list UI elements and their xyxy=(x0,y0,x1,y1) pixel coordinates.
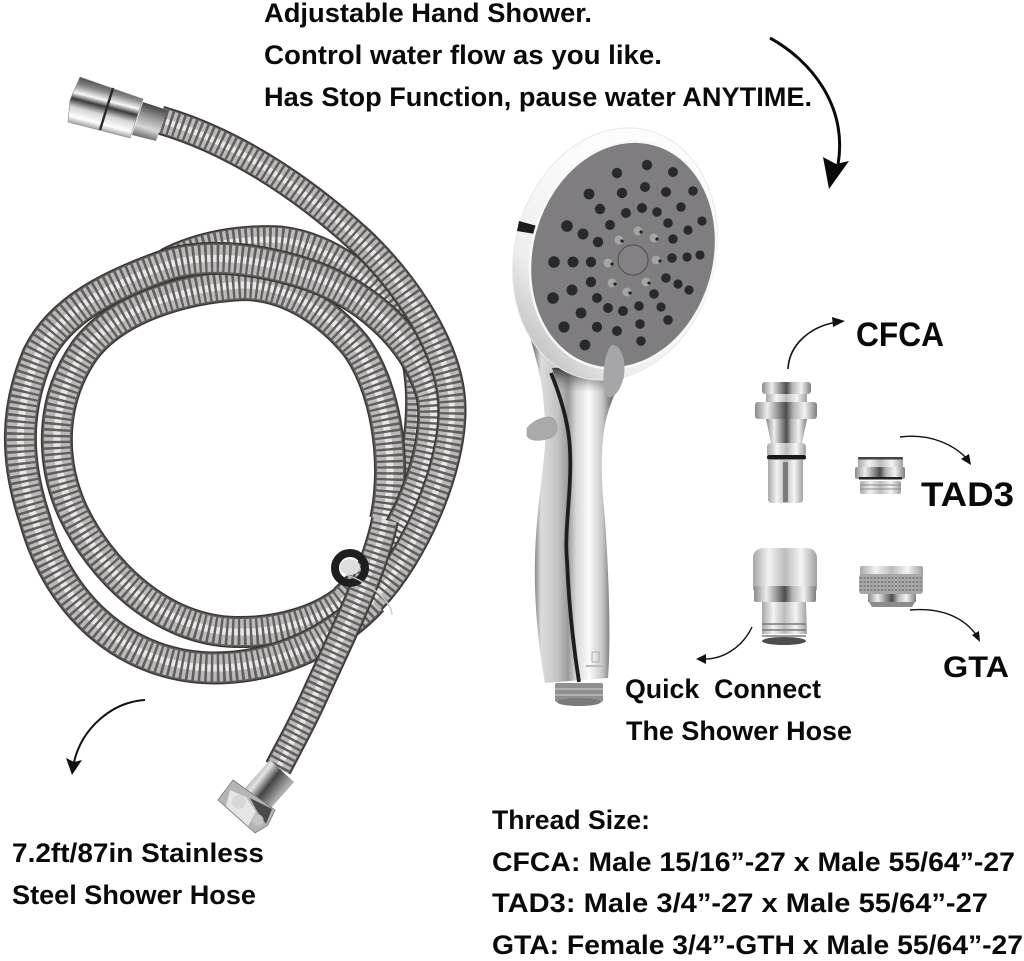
shower head rim xyxy=(484,103,746,405)
nozzle holes xyxy=(547,160,707,350)
thread size specifications: TAD3: Male 3/4”-27 x Male 55/64”-27 xyxy=(492,888,988,918)
arrow: to quick connect xyxy=(696,627,752,664)
hose strand to bottom nut xyxy=(278,520,385,768)
center disc xyxy=(618,245,648,275)
thread size specifications: CFCA: Male 15/16”-27 x Male 55/64”-27 xyxy=(492,847,1015,877)
hose outer coil xyxy=(20,258,434,668)
arrow: to TAD3 xyxy=(900,436,971,465)
brand mark on handle xyxy=(586,652,604,667)
bottom hose nut xyxy=(218,760,294,833)
chrome notch on rim xyxy=(517,221,537,234)
label: hose length: Steel Shower Hose xyxy=(12,880,256,910)
headline: adjustable hand shower xyxy=(264,0,812,112)
hand shower xyxy=(484,103,746,706)
handle shadow at neck xyxy=(552,366,607,392)
arrow: to GTA xyxy=(910,610,980,642)
label: TAD3: TAD3 xyxy=(921,476,1014,514)
thread size specifications: GTA: Female 3/4”-GTH x Male 55/64”-27 xyxy=(492,930,1023,960)
stop button slider xyxy=(527,417,557,440)
center spray nozzles xyxy=(604,226,662,296)
hose hidden upper strand xyxy=(167,240,420,580)
arrow: to hose label xyxy=(66,700,145,775)
label: hose length xyxy=(12,838,264,910)
hose xyxy=(20,120,452,768)
arrow: to hand shower xyxy=(770,38,849,189)
rubber washer tied to hose xyxy=(335,553,392,615)
label: hose length: 7.2ft/87in Stainless xyxy=(12,838,264,868)
adapter: GTA xyxy=(859,566,923,607)
label: quick connect: The Shower Hose xyxy=(626,716,852,746)
thread size specifications: Thread Size: xyxy=(492,805,650,835)
shower head face xyxy=(504,119,742,391)
hose inner coil xyxy=(57,285,390,632)
thumb tab xyxy=(604,345,624,397)
arrow: to CFCA xyxy=(788,317,845,369)
thread at handle base xyxy=(555,683,603,706)
label: CFCA: CFCA xyxy=(856,316,944,354)
adapter: CFCA xyxy=(755,382,817,503)
hose strand from top connector xyxy=(160,120,452,600)
label: GTA: GTA xyxy=(943,651,1009,684)
label: quick connect xyxy=(625,674,852,746)
headline: adjustable hand shower: Has Stop Function, pause water ANYTIME. xyxy=(264,82,812,112)
headline: adjustable hand shower: Control water flow as you like. xyxy=(264,40,662,70)
shower handle xyxy=(528,330,632,683)
handle dark reflection xyxy=(551,373,579,682)
top hose connector xyxy=(68,77,167,141)
adapter: TAD3 xyxy=(855,457,905,494)
adapter: quick connect xyxy=(753,548,817,645)
thread size specifications xyxy=(492,805,1023,960)
label: quick connect: Quick Connect xyxy=(625,674,821,704)
